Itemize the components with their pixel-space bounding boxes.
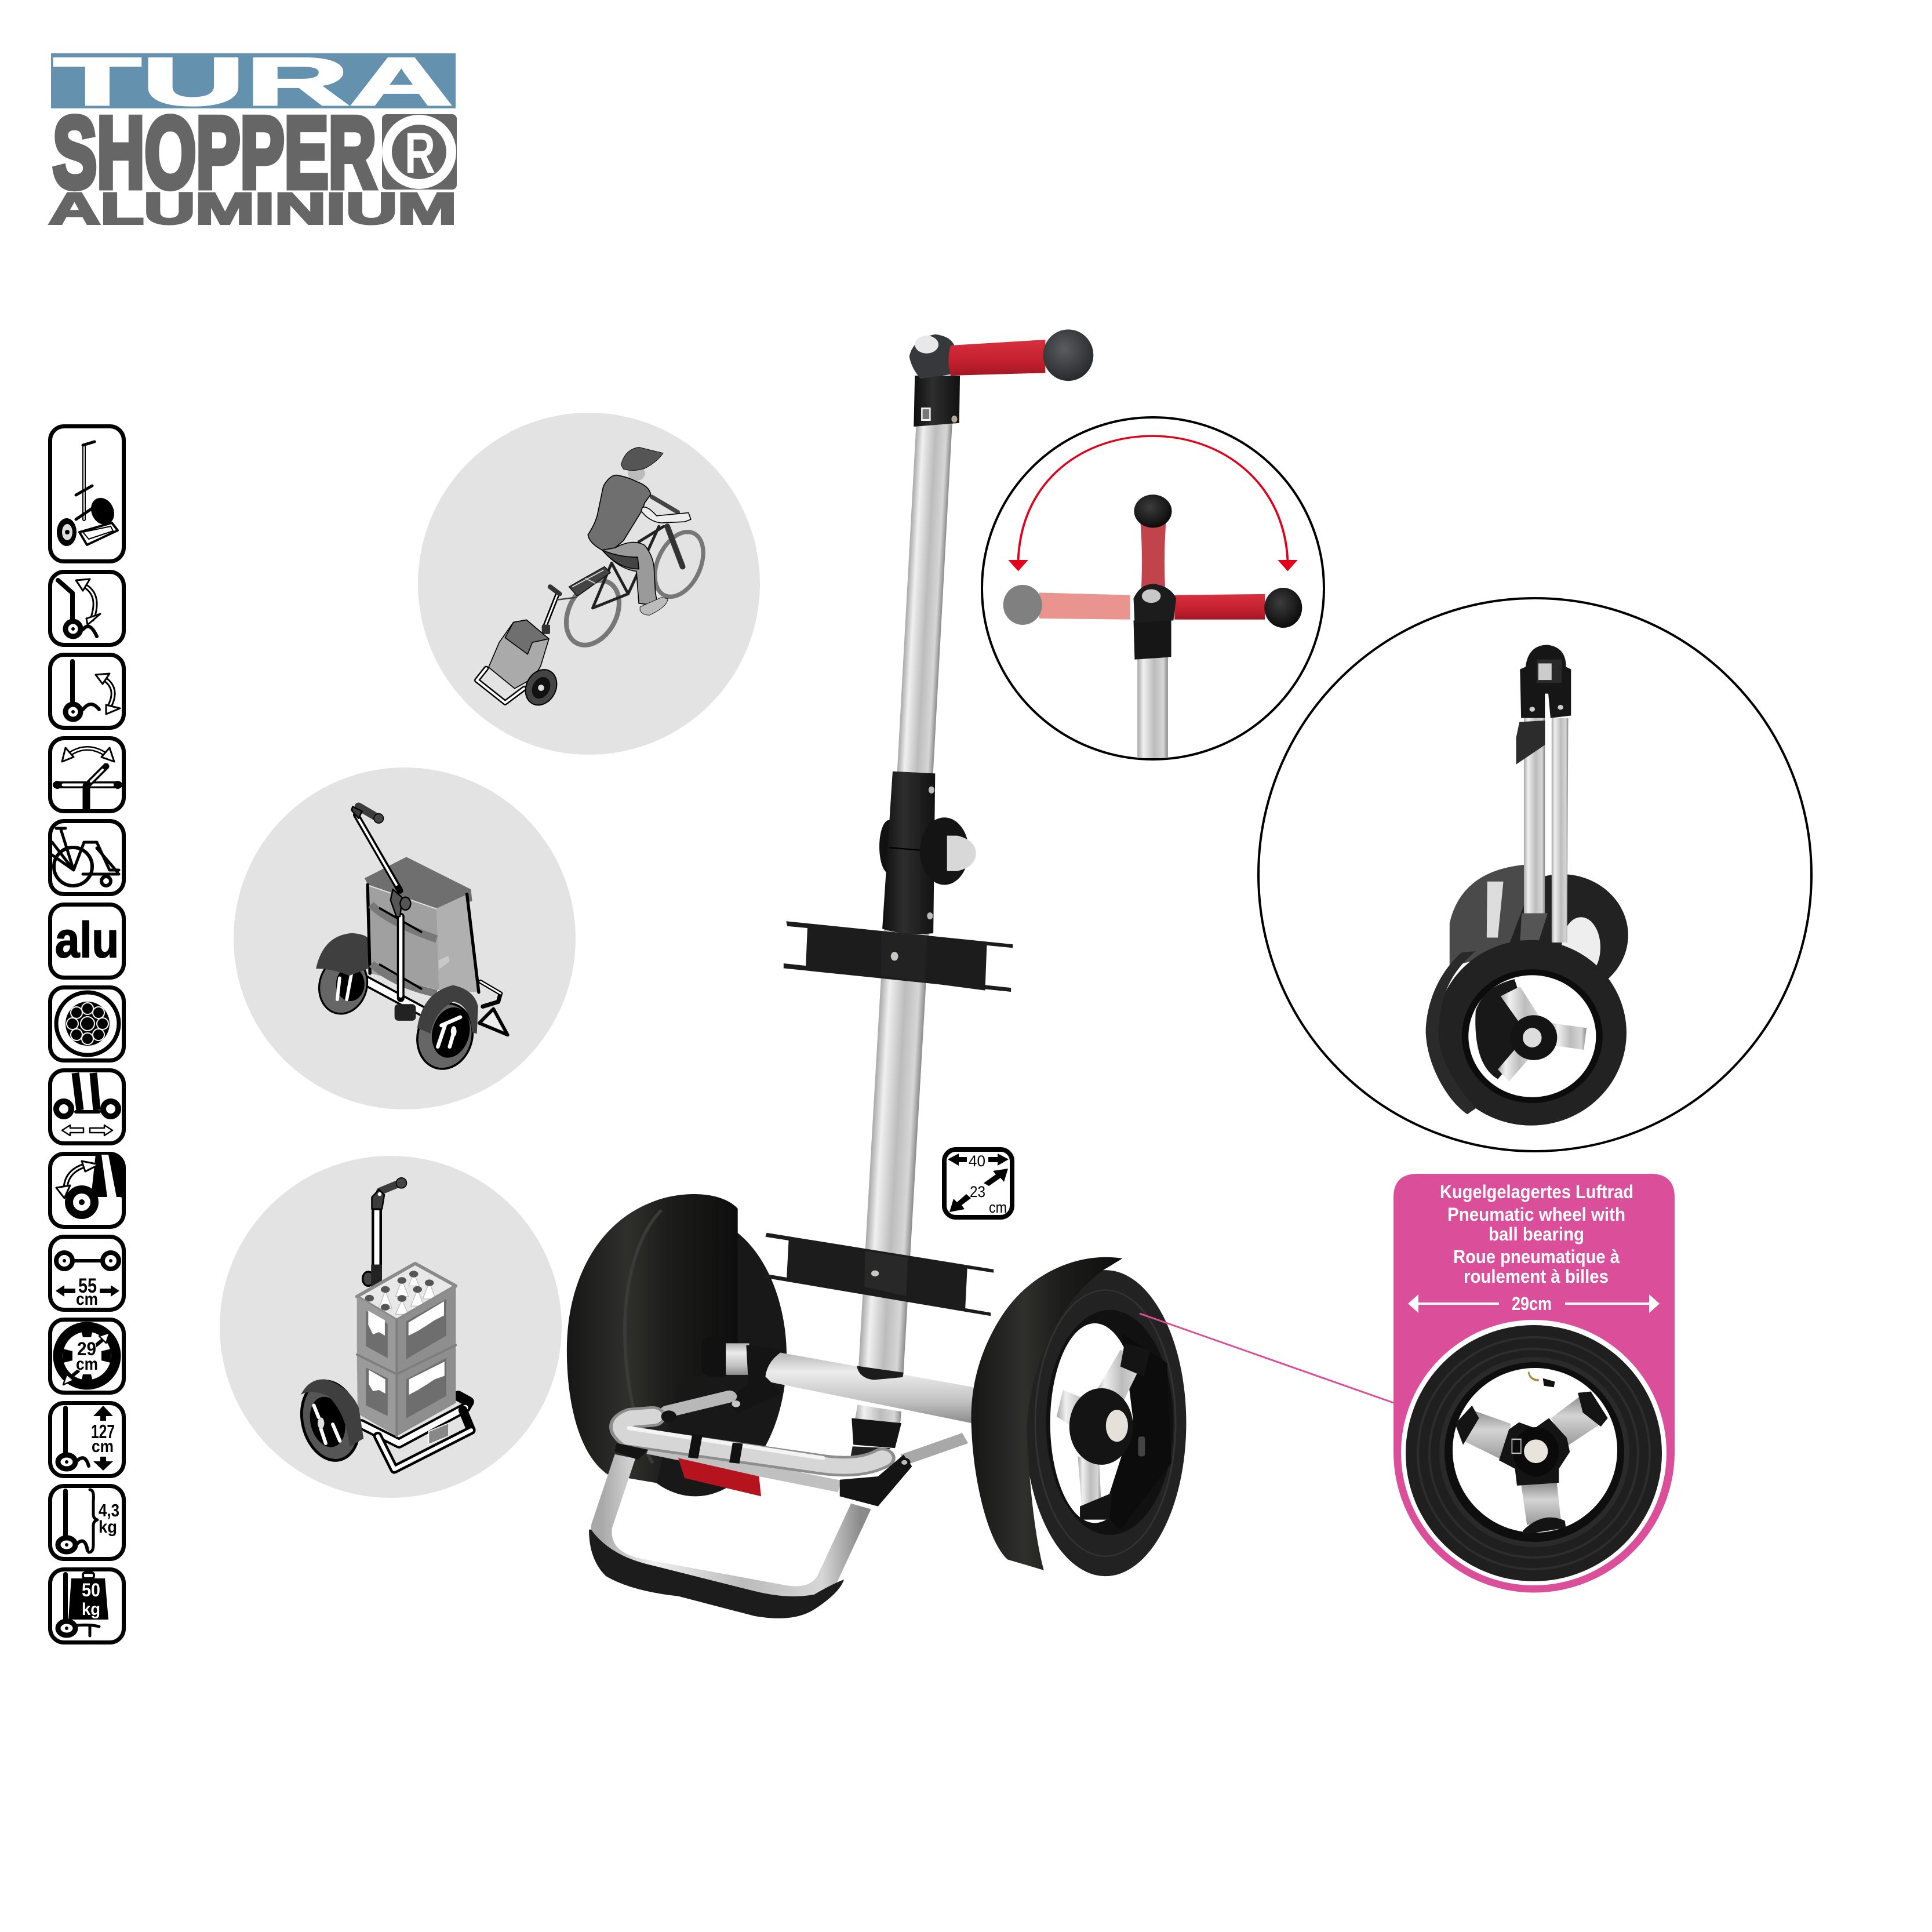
logo: ALUMINIUM: ALUMINIUM [49,184,457,234]
right arm [904,1438,965,1460]
icon: weight 4,3 kg: 4,3 [99,1500,119,1520]
spokes [1463,1396,1601,1525]
reflector [678,1435,761,1496]
right fender [971,1257,1122,1570]
upright handle [1134,494,1172,589]
upper assembly: handle, clamp, bracket [784,329,1093,992]
connector line to wheel detail [1140,1314,1393,1403]
base frame [361,1396,471,1469]
wheel [293,1375,368,1467]
brand logo [49,43,457,234]
icon: wheel base 55 cm [50,1237,124,1310]
callout text: Pneumatic wheel with [1447,1204,1625,1225]
left axle joint [701,1337,784,1413]
detail circle: folded trolley [1258,598,1811,1151]
icon: height 127 cm: 127 [91,1421,115,1442]
spoke clamps [1455,1391,1608,1535]
icon: folded size 40 x 23 cm: 40 [969,1152,985,1170]
icon: weight 4,3 kg [50,1486,124,1559]
upper bracket [784,921,1013,992]
folded poles [1487,718,1568,943]
callout text: Kugelgelagertes Luftrad [1440,1181,1633,1202]
icon: ball bearing wheel [50,988,124,1061]
callout: pneumatic wheel panel [1393,1174,1675,1593]
callout background [1393,1174,1675,1593]
handle [363,1178,406,1287]
icon: wheel diameter 29 cm: 29 [77,1338,96,1359]
logo: SHOPPER wordmark: SHOPPER [53,96,376,209]
faded handle position [1003,585,1130,625]
icon: alu [50,904,124,977]
front wheel [1426,940,1627,1126]
upper telescopic pole [897,422,952,778]
clamp [879,772,976,934]
icon: swivel handle [50,738,124,812]
pole [1137,657,1168,758]
frame and stand [359,977,508,1035]
handle [351,806,410,998]
lower telescopic pole [858,926,929,1374]
icon: bike with trailer [50,821,124,894]
rotation arrow [1008,436,1298,571]
icon: alu: alu [55,912,119,968]
circle illustration: trolley carrying a box [234,767,576,1109]
current handle position [1174,588,1302,628]
icon: weight 4,3 kg: kg [99,1518,117,1537]
icon column [50,427,124,1643]
bicycle [556,497,713,654]
callout text [1440,1181,1633,1287]
icon: wheel diameter 29 cm: cm [76,1355,98,1374]
left fender [567,1194,738,1483]
icon: folded size 40 x 23 cm [944,1149,1012,1217]
rear frame tube [623,1396,882,1466]
kickstand foot [589,1530,844,1618]
icon: load 50 kg: kg [82,1600,100,1619]
icon: folding frame [50,1154,124,1227]
logo: registered mark block: R [405,121,435,185]
rear tyre [604,1217,787,1496]
lower frame bar [649,1448,840,1486]
icon: height 127 cm: cm [92,1437,114,1456]
box load [365,857,479,994]
frame corners [614,1410,912,1507]
main product photo: trolley [567,329,1186,1618]
pole collar [857,1366,904,1380]
rear wheel [313,933,373,1019]
width dimension 29cm: 29cm [1512,1293,1552,1314]
icon: wheel base 55 cm: cm [76,1290,98,1309]
lower bracket [765,1233,994,1316]
icon: upright handle with rotate arrow [50,655,124,728]
icon: load 50 kg [50,1570,124,1643]
red grip [948,340,1045,376]
valve [1529,1372,1555,1387]
knuckle and sleeve [1134,584,1176,660]
chassis [567,1194,1186,1618]
icon: wheel diameter 29 cm [50,1319,124,1392]
trolley in tow [476,587,576,711]
folded top hinge [1516,645,1571,765]
front wheel [410,985,480,1075]
circle illustration: trolley carrying bottle crates [220,1156,562,1498]
pole foot [850,1405,901,1460]
icon: trolley [50,427,124,561]
icon: height 127 cm [50,1403,124,1476]
callout text: ball bearing [1489,1224,1584,1245]
hub [1499,1418,1570,1486]
kickstand bow [601,1457,861,1595]
handle ball [1043,329,1093,381]
logo: TURA band [51,43,456,119]
icon: wheel base 55 cm: 55 [78,1275,97,1297]
knuckle [909,334,955,379]
width dimension 29cm [1408,1293,1660,1314]
axle tube [762,1350,974,1423]
wheel photo [1401,1320,1667,1585]
callout text: roulement à billes [1464,1266,1609,1287]
rider [588,447,691,615]
bottle crates [357,1264,456,1436]
icon: tilted handle with rotate arrow [50,572,124,645]
circle illustration: towing behind bicycle [418,413,760,755]
right wheel [1025,1270,1186,1576]
icon: folded size 40 x 23 cm: cm [989,1199,1007,1216]
handle sleeve [914,376,960,427]
logo: TURA band: TURA [53,43,453,119]
icon: folded size 40 x 23 cm: 23 [970,1183,985,1200]
callout text: Roue pneumatique à [1453,1246,1620,1267]
detail circle: swivel handle [982,417,1324,759]
icon: wheel track arrows [50,1070,124,1143]
icon: load 50 kg: 50 [82,1580,100,1600]
logo: registered mark block [382,114,457,190]
rear wheel [1450,864,1628,996]
